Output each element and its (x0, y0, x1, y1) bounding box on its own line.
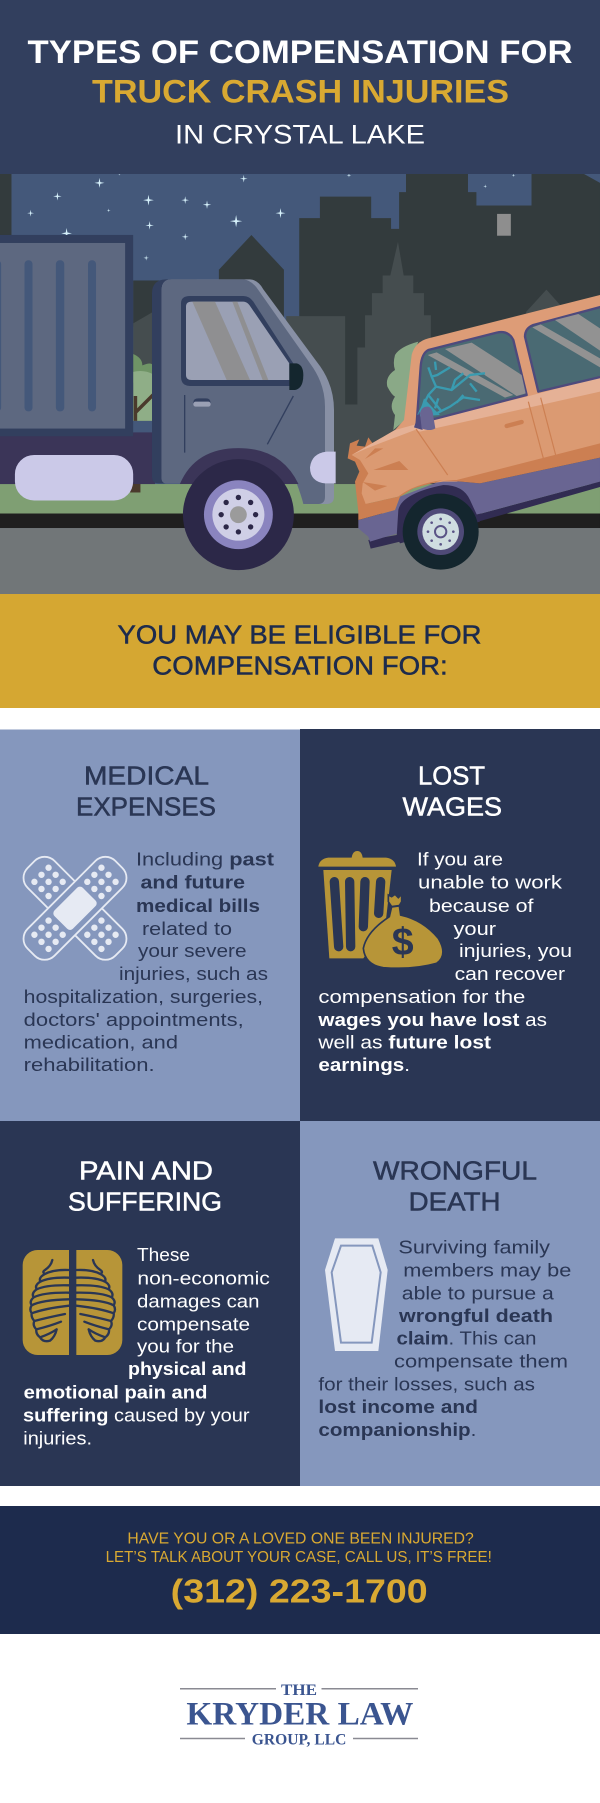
heading: medical expenses: EXPENSES (76, 794, 216, 822)
text: medical expenses: Including past (136, 850, 274, 870)
heading: wrongful death: DEATH (409, 1189, 501, 1217)
text: wrongful death: compensate them (394, 1351, 568, 1371)
text: wrongful death: companionship . (318, 1420, 476, 1440)
text: pain and suffering (23, 1245, 270, 1448)
text: wrongful death: for their losses, such as (318, 1374, 535, 1394)
heading: wrongful death: WRONGFUL (373, 1158, 537, 1186)
text: medical expenses: and future (140, 873, 245, 893)
icon: trash can and money bag: $ (392, 920, 414, 964)
text: lost wages: unable to work (418, 873, 563, 893)
heading: wrongful death (373, 1158, 537, 1217)
call to action band: (312) 223-1700 (171, 1573, 428, 1610)
text: wrongful death: claim . This can (396, 1328, 536, 1348)
text: lost wages: well as future lost (317, 1033, 491, 1053)
text: pain and suffering: These (137, 1245, 190, 1265)
car (348, 295, 600, 570)
text: medical expenses: medication, and (24, 1033, 178, 1053)
panel: lost wages (300, 729, 600, 1121)
text: pain and suffering: you for the (137, 1337, 234, 1357)
text: pain and suffering: injuries. (23, 1428, 92, 1448)
text: lost wages: If you are (417, 850, 503, 870)
text: pain and suffering: compensate (137, 1314, 250, 1334)
city skyline (133, 168, 600, 497)
text: lost wages: injuries, you (459, 941, 572, 961)
icon: rib cage (23, 1248, 122, 1357)
text: wrongful death: members may be (403, 1260, 571, 1280)
text: wrongful death: Surviving family (398, 1237, 550, 1257)
text: lost wages: your (454, 919, 496, 939)
text: lost wages: compensation for the (318, 987, 525, 1007)
call to action band: LET’S TALK ABOUT YOUR CASE, CALL US, IT’S FREE! (106, 1549, 492, 1566)
text: medical expenses: doctors' appointments, (24, 1010, 244, 1030)
text: lost wages: wages you have lost as (317, 1010, 547, 1030)
text: wrongful death (318, 1237, 571, 1440)
text: wrongful death: wrongful death (398, 1306, 553, 1326)
text: pain and suffering: emotional pain and (24, 1382, 207, 1402)
logo: The Kryder Law Group, LLC: KRYDER LAW (186, 1696, 413, 1732)
title: IN CRYSTAL LAKE (175, 120, 425, 150)
icon: coffin (325, 1238, 388, 1351)
text: pain and suffering: damages can (137, 1292, 260, 1312)
tree behind truck (133, 354, 153, 421)
eligibility banner: YOU MAY BE ELIGIBLE FOR (118, 621, 482, 649)
heading: medical expenses (76, 763, 216, 822)
text: pain and suffering: non-economic (137, 1269, 270, 1289)
text: medical expenses: your severe (138, 941, 246, 961)
text: lost wages: earnings . (318, 1055, 410, 1075)
icon: trash can and money bag (318, 851, 443, 968)
text: pain and suffering: suffering caused by your (23, 1405, 250, 1425)
text: medical expenses: related to (142, 919, 232, 939)
title: TRUCK CRASH INJURIES (92, 74, 509, 110)
text: medical expenses: injuries, such as (119, 964, 268, 984)
panel: medical expenses (0, 730, 300, 1121)
logo: The Kryder Law Group, LLC: THE (281, 1682, 317, 1699)
title (28, 34, 572, 150)
call to action band (0, 1506, 600, 1634)
header band (0, 0, 600, 174)
text: lost wages (317, 850, 572, 1075)
text: lost wages: can recover (455, 964, 565, 984)
text: wrongful death: lost income and (318, 1397, 478, 1417)
eligibility banner (0, 594, 600, 708)
truck cargo box and chassis (0, 235, 155, 501)
illustration: truck crash at night (0, 168, 600, 595)
heading: medical expenses: MEDICAL (84, 763, 209, 791)
icon: crossed bandages (18, 851, 132, 966)
truck cab (152, 279, 336, 504)
heading: pain and suffering: SUFFERING (68, 1189, 222, 1217)
title: TYPES OF COMPENSATION FOR (28, 34, 572, 70)
truck wheel (180, 448, 298, 570)
logo: The Kryder Law Group, LLC (180, 1682, 418, 1749)
text: lost wages: because of (429, 896, 535, 916)
heading: pain and suffering (68, 1158, 222, 1217)
panel: pain and suffering (0, 1121, 300, 1486)
text: wrongful death: able to pursue a (402, 1283, 555, 1303)
text: medical expenses (24, 850, 274, 1075)
heading: lost wages: WAGES (402, 794, 502, 822)
heading: pain and suffering: PAIN AND (79, 1158, 213, 1186)
heading: lost wages: LOST (418, 763, 485, 791)
call to action band: HAVE YOU OR A LOVED ONE BEEN INJURED? (127, 1530, 474, 1547)
heading: lost wages (402, 763, 502, 822)
grass, kerb and road (0, 484, 600, 595)
text: pain and suffering: physical and (128, 1359, 246, 1379)
logo: The Kryder Law Group, LLC: GROUP, LLC (252, 1732, 346, 1749)
panel: wrongful death (300, 1121, 600, 1486)
text: medical expenses: hospitalization, surgeries, (24, 987, 263, 1007)
stars in night sky (27, 173, 515, 261)
text: medical expenses: rehabilitation. (24, 1055, 155, 1075)
text: medical expenses: medical bills (136, 896, 260, 916)
eligibility banner: COMPENSATION FOR: (152, 652, 448, 680)
